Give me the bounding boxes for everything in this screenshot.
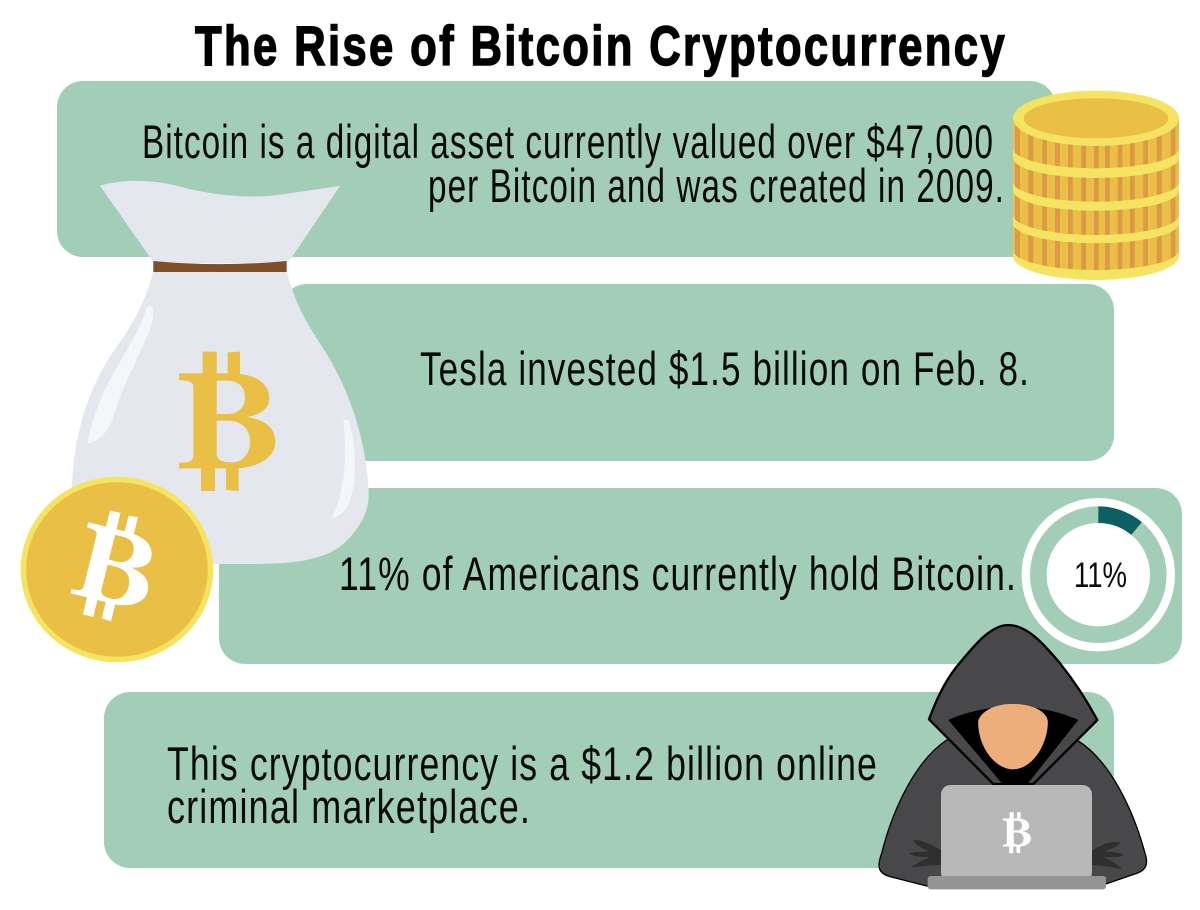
text: criminal marketplace: criminal marketplace. <box>167 780 531 833</box>
text: criminal marketplace: This cryptocurrency is a $1.2 billion online <box>167 737 878 790</box>
icon: money bag <box>72 181 369 564</box>
icon: coin stack <box>1013 91 1179 280</box>
icon: hooded hacker with laptop <box>879 625 1147 889</box>
panel: bitcoin value <box>57 81 1056 257</box>
panel: criminal marketplace <box>104 692 1114 868</box>
panel: americans holding bitcoin <box>219 488 1182 664</box>
label: 11 percent: 11% <box>1074 556 1127 595</box>
chart: 11 percent donut <box>1026 502 1171 647</box>
panel: tesla investment <box>281 284 1114 461</box>
icon: bitcoin coin <box>23 480 211 660</box>
